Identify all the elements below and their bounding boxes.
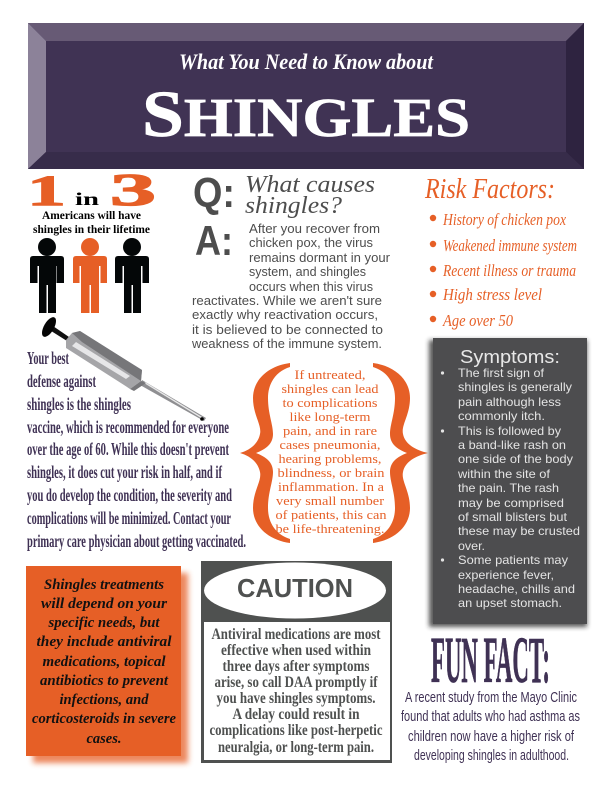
answer: A:: [195, 217, 233, 264]
panel: symptoms: [429, 338, 587, 627]
panel: treatments: [26, 566, 188, 763]
treatments text: infections, and: [60, 692, 149, 708]
symptoms list: of small blisters but: [458, 510, 568, 524]
treatments text: antibiotics to prevent: [40, 673, 169, 689]
person icon orange: [73, 238, 107, 313]
left brace: [240, 363, 290, 543]
symptoms list: The first sign of: [458, 366, 545, 380]
text block: vaccine advice: defense against: [27, 371, 96, 391]
complications text: shingles can lead: [282, 381, 379, 396]
question and answer: [191, 169, 390, 351]
symptoms list: [441, 366, 580, 610]
complications text: pain, and in rare: [283, 423, 377, 438]
symptoms list: these may be crusted: [458, 524, 580, 538]
risk factors list: [430, 210, 577, 330]
complications text: If untreated,: [294, 367, 366, 382]
text block: vaccine advice: you do develop the condition, the severity and: [27, 485, 232, 505]
panel: caution sign: [201, 561, 392, 763]
symptoms list: over.: [458, 539, 485, 553]
symptoms list: shingles is generally: [458, 380, 572, 394]
symptoms list: headache, chills and: [458, 582, 575, 596]
symptoms list: a band-like rash on: [458, 438, 566, 452]
main title: SHINGLES: [142, 78, 470, 151]
risk factors list: Age over 50: [442, 311, 513, 330]
symptoms list: the pain. The rash: [458, 481, 559, 495]
answer: it is believed to be connected to: [192, 323, 383, 337]
caution text: A delay could result in: [232, 706, 360, 723]
risk factors list: High stress level: [442, 285, 542, 304]
complications text: very small number: [276, 493, 385, 508]
symptoms list: pain although less: [458, 395, 561, 409]
right brace: [373, 363, 428, 543]
treatments text: cases.: [86, 731, 122, 747]
caution text: Antiviral medications are most: [212, 626, 381, 643]
answer: exactly why reactivation occurs,: [192, 308, 378, 322]
caution text: arise, so call DAA promptly if: [214, 674, 378, 691]
answer: occurs when this virus: [249, 280, 373, 294]
caution text: [210, 626, 382, 756]
symptoms list: may be comprised: [458, 496, 564, 510]
complications text: [276, 367, 387, 536]
panel: fun fact: [401, 624, 580, 764]
answer: weakness of the immune system.: [191, 337, 382, 351]
statistic: 1 in 3: 3: [110, 165, 156, 215]
question: What causes: [245, 172, 375, 198]
text block: vaccine advice: complications will be minimized. Contact your: [27, 508, 231, 528]
treatments text: corticosteroids in severe: [32, 711, 176, 727]
symptoms list: within the site of: [457, 467, 551, 481]
text block: vaccine advice: vaccine, which is recommended for everyone: [27, 417, 229, 437]
icon: syringe: [39, 315, 206, 421]
text block: vaccine advice: over the age of 60. While this doesn't prevent: [27, 439, 229, 459]
complications text: inflammation. In a: [278, 479, 384, 494]
caution text: neuralgia, or long-term pain.: [218, 739, 374, 756]
complications text: like long-term: [290, 409, 370, 424]
symptoms list: an upset stomach.: [458, 596, 562, 610]
question: shingles?: [245, 193, 342, 219]
symptoms list: Some patients may: [458, 553, 568, 567]
answer: remains dormant in your: [249, 251, 390, 265]
text block: vaccine advice: [27, 348, 246, 551]
caution heading: CAUTION: [237, 573, 353, 603]
person icon black: [30, 238, 64, 313]
answer: After you recover from: [249, 222, 380, 236]
symptoms list: This is followed by: [458, 424, 561, 438]
symptoms list: one side of the body: [458, 452, 573, 466]
text block: vaccine advice: shingles is the shingles: [27, 394, 131, 414]
subtitle: What You Need to Know about: [179, 49, 434, 74]
caution text: three days after symptoms: [222, 658, 370, 675]
treatments text: [32, 577, 176, 747]
treatments text: specific needs, but: [48, 615, 160, 631]
title banner: [28, 23, 584, 169]
text block: vaccine advice: shingles, it does cut your risk in half, and if: [27, 462, 223, 482]
risk factors heading: Risk Factors:: [424, 173, 555, 205]
statistic: 1 in 3: Americans will have: [42, 210, 141, 222]
question: Q:: [193, 169, 235, 216]
complications text: blindness, or brain: [278, 465, 385, 480]
caution text: you have shingles symptoms.: [216, 690, 376, 707]
text block: vaccine advice: Your best: [27, 348, 69, 368]
answer: system, and shingles: [249, 265, 366, 279]
treatments text: will depend on your: [41, 596, 167, 612]
risk factors list: Recent illness or trauma: [442, 261, 576, 280]
statistic: 1 in 3: in: [75, 189, 99, 209]
answer: [191, 217, 390, 351]
fun fact text: [401, 690, 580, 764]
statistic: 1 in 3: [27, 165, 156, 236]
callout: complications in braces: [240, 363, 428, 543]
question: [193, 169, 375, 219]
complications text: hearing problems,: [278, 451, 382, 466]
complications text: be life-threatening.: [276, 521, 384, 536]
treatments text: they include antiviral: [36, 634, 172, 650]
answer: reactivates. While we aren't sure: [192, 294, 382, 308]
symptoms list: experience fever,: [458, 568, 554, 582]
symptoms heading: Symptoms:: [460, 347, 560, 367]
pictogram: three people, one highlighted: [30, 238, 149, 313]
answer: chicken pox, the virus: [249, 236, 373, 250]
risk factors list: History of chicken pox: [442, 210, 566, 229]
complications text: of patients, this can: [276, 507, 387, 522]
statistic: 1 in 3: 1: [27, 168, 66, 215]
caution text: effective when used within: [221, 642, 371, 659]
treatments text: Shingles treatments: [44, 577, 164, 593]
panel: risk factors: [424, 173, 577, 330]
caution text: complications like post-herpetic: [210, 722, 382, 739]
symptoms list: commonly itch.: [458, 409, 545, 423]
treatments text: medications, topical: [42, 654, 166, 670]
statistic: 1 in 3: shingles in their lifetime: [33, 224, 150, 236]
text block: vaccine advice: primary care physician about getting vaccinated.: [27, 531, 246, 551]
complications text: to complications: [282, 395, 378, 410]
person icon black: [115, 238, 149, 313]
complications text: cases pneumonia,: [280, 437, 380, 452]
